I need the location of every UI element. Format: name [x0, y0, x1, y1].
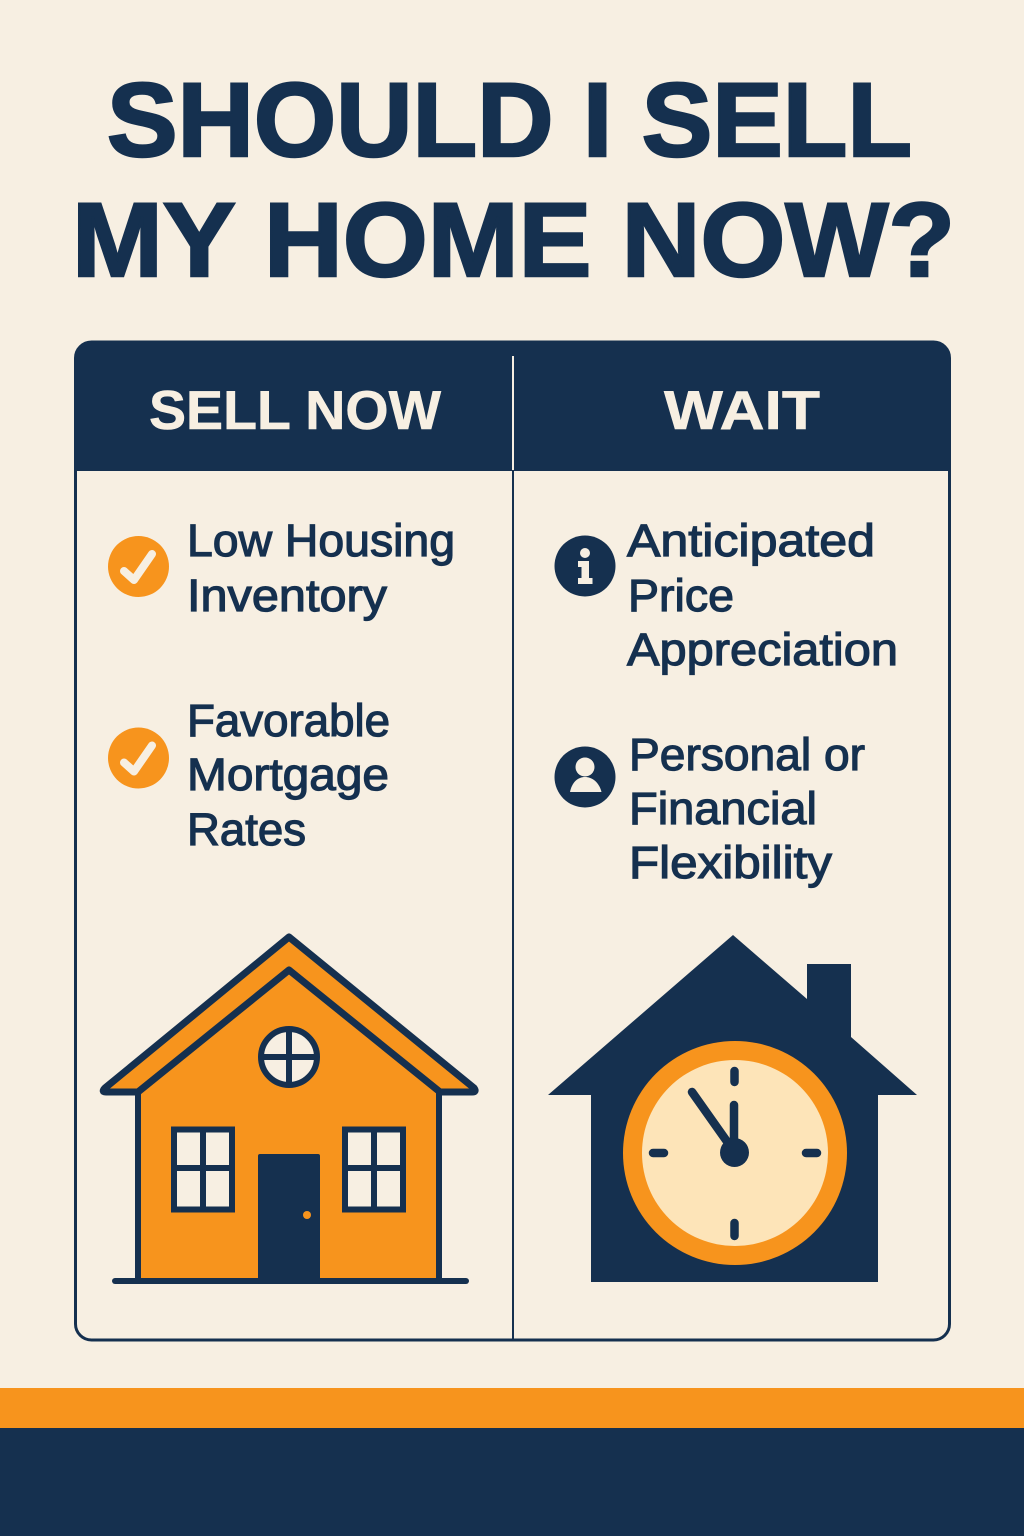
text: personal or financial flexibility: Financial [629, 783, 817, 834]
text: low housing inventory: Inventory [187, 570, 388, 621]
icon: check low inventory [108, 536, 169, 597]
clock [623, 1041, 847, 1265]
text: favorable mortgage rates [187, 695, 390, 855]
footer: navy band [0, 1428, 1024, 1536]
footer: orange stripe [0, 1388, 1024, 1428]
title: SHOULD I SELL [107, 62, 912, 179]
icon: house with clock [548, 935, 917, 1282]
door [258, 1154, 320, 1284]
text: personal or financial flexibility: Personal or [629, 729, 865, 780]
right window [344, 1129, 404, 1210]
title [72, 62, 955, 299]
text: anticipated price appreciation [627, 515, 898, 675]
text: anticipated price appreciation: Anticipated [627, 515, 875, 566]
panel: comparison table [75, 341, 950, 1340]
text: personal or financial flexibility [629, 729, 865, 888]
text: anticipated price appreciation: Price [628, 570, 734, 621]
icon: check mortgage rates [108, 728, 169, 788]
icon: person [554, 746, 616, 808]
text: low housing inventory: Low Housing [187, 515, 455, 566]
icon: info [554, 536, 616, 596]
icon: orange house [103, 937, 475, 1284]
text: personal or financial flexibility: Flexibility [629, 837, 833, 888]
text: favorable mortgage rates: Favorable [187, 695, 390, 746]
text: favorable mortgage rates: Mortgage [187, 749, 389, 800]
heading: wait: WAIT [664, 379, 820, 441]
round attic window [261, 1029, 317, 1085]
text: favorable mortgage rates: Rates [187, 804, 306, 855]
text: low housing inventory [187, 515, 455, 621]
text: anticipated price appreciation: Appreciation [627, 624, 898, 675]
heading: sell now: SELL NOW [149, 379, 441, 441]
title: MY HOME NOW? [72, 182, 955, 299]
left window [173, 1129, 233, 1210]
